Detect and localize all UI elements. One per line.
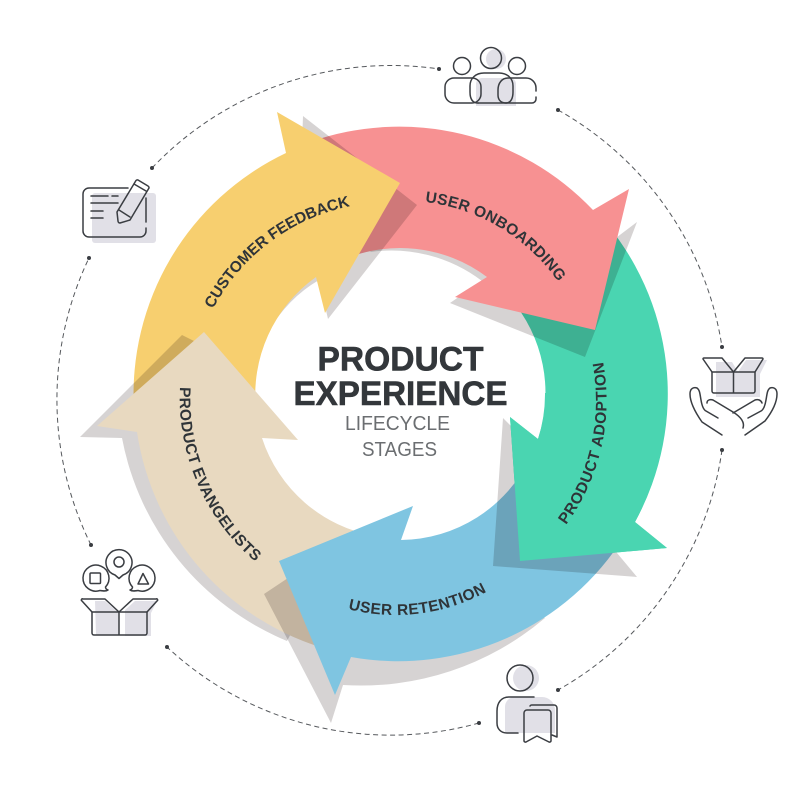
icon: team of people bbox=[445, 48, 536, 106]
arrow shadow: customer feedback bbox=[268, 116, 417, 332]
arrow: customer feedback bbox=[134, 112, 400, 410]
arrow shadow: user retention bbox=[264, 570, 545, 723]
arrow: user retention bbox=[279, 458, 625, 695]
title: LIFECYCLE bbox=[345, 412, 450, 435]
title bbox=[294, 340, 508, 461]
label: product evangelists: PRODUCT EVANGELISTS bbox=[180, 388, 261, 560]
icon: gift box held in hands bbox=[690, 358, 777, 435]
arrow: product adoption head bbox=[510, 393, 667, 561]
title: PRODUCT bbox=[318, 340, 484, 378]
arrow shadow: product adoption bbox=[493, 418, 637, 577]
label: product adoption: PRODUCT ADOPTION bbox=[558, 362, 607, 524]
label: user onboarding: USER ONBOARDING bbox=[426, 192, 565, 280]
arrow: product evangelists bbox=[97, 332, 375, 650]
icon: person with bookmark documents bbox=[497, 665, 557, 742]
arrow shadow: user onboarding bbox=[370, 220, 637, 357]
dashed ring connecting the icons bbox=[57, 65, 724, 735]
icon: card with pencil bbox=[83, 180, 156, 243]
label: customer feedback: CUSTOMER FEEDBACK bbox=[206, 196, 350, 307]
title: STAGES bbox=[362, 438, 437, 461]
arrow: user onboarding bbox=[310, 127, 629, 330]
icon: open box with speech bubbles bbox=[81, 550, 158, 636]
arrow shadow: product evangelists bbox=[80, 335, 330, 641]
title: EXPERIENCE bbox=[294, 375, 508, 413]
arrow: product adoption tail (underlayer) bbox=[510, 216, 668, 561]
label: user retention: USER RETENTION bbox=[350, 582, 486, 616]
